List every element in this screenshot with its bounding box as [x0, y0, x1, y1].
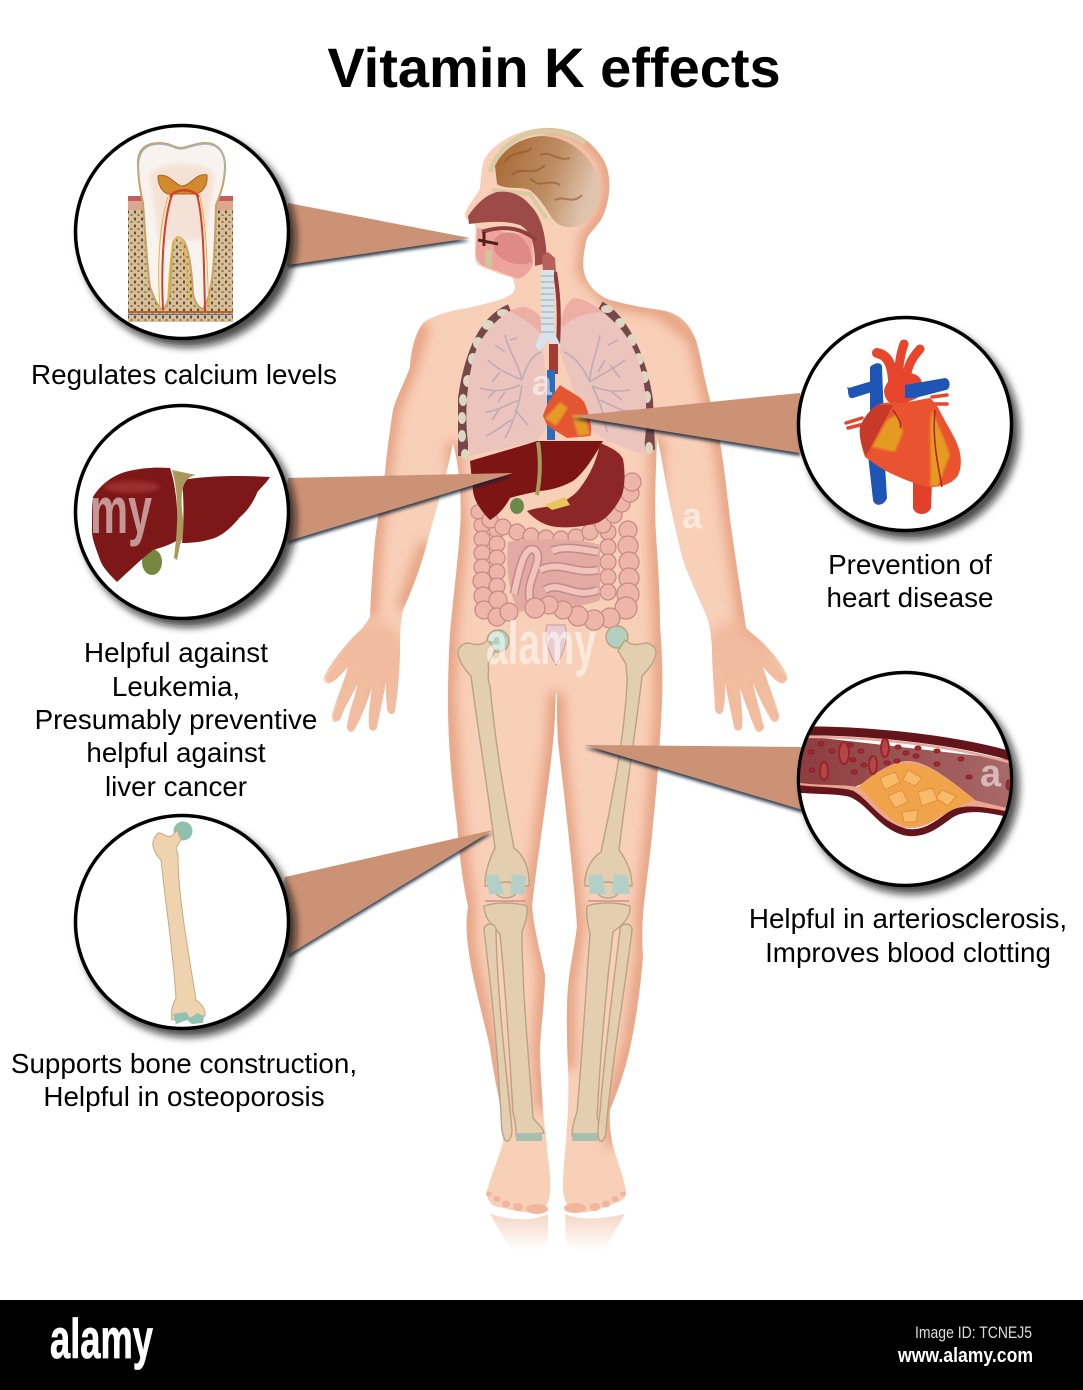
- plaque lining: [800, 761, 1015, 828]
- watermarks: my: [90, 473, 152, 547]
- label: leukemia and liver cancer: Helpful against: [84, 637, 268, 668]
- body silhouette: [324, 128, 787, 1212]
- panel: artery: [795, 672, 1015, 886]
- label: leukemia and liver cancer: helpful against: [86, 737, 266, 768]
- pointer: tooth callout: [288, 203, 470, 265]
- gallbladder: [142, 549, 162, 575]
- pointer: artery callout: [585, 745, 803, 810]
- panel: femur bone: [76, 816, 288, 1028]
- pointer: heart callout: [572, 393, 800, 453]
- right atrium shading: [860, 405, 893, 456]
- pulmonary vessel: [905, 378, 950, 398]
- trachea: [535, 252, 561, 351]
- label: heart disease: Prevention of: [828, 549, 992, 580]
- pointer: bone callout: [285, 830, 493, 955]
- superior vena cava: [870, 363, 884, 420]
- coronary vessels: [893, 410, 942, 487]
- red blood cells: [808, 739, 1012, 790]
- label: leukemia and liver cancer: Presumably preventive: [35, 704, 317, 735]
- plaque fat: [858, 763, 975, 826]
- label: leukemia and liver cancer: Leukemia,: [112, 671, 240, 702]
- panel: heart: [798, 318, 1012, 530]
- label: bone construction: Helpful in osteoporosis: [43, 1081, 325, 1112]
- right lung: [560, 298, 646, 454]
- artery lumen: [795, 735, 1015, 810]
- label: bone construction: Supports bone construction,: [11, 1048, 357, 1079]
- aortic arch: [884, 373, 922, 406]
- mouth and tongue: [476, 228, 536, 278]
- watermarks: a: [980, 753, 1002, 795]
- small intestine: [507, 539, 600, 612]
- watermarks: a: [682, 495, 703, 536]
- jaw bone: [128, 196, 233, 322]
- label: arteriosclerosis: Improves blood clotting: [765, 937, 1051, 968]
- lower artery wall: [795, 789, 1015, 833]
- label: leukemia and liver cancer: liver cancer: [105, 771, 247, 802]
- gallbladder and ligament: [510, 442, 570, 514]
- rectum: [546, 625, 567, 665]
- aortic branches: [846, 344, 947, 428]
- left lung: [466, 306, 550, 456]
- footer bar: [0, 1300, 1083, 1390]
- footer logo: alamy: [50, 1307, 153, 1370]
- right hand fingers: [717, 660, 782, 727]
- stomach: [527, 443, 625, 527]
- brain and skull: [490, 131, 600, 227]
- lower colon: [525, 596, 620, 630]
- femoral head: [174, 822, 192, 840]
- hepatic ligament: [172, 470, 196, 560]
- watermarks: [90, 362, 1002, 795]
- descending aorta: [913, 480, 932, 514]
- panel: tooth: [76, 126, 288, 338]
- nasal cavity and pharynx: [468, 192, 547, 266]
- ribs right: [600, 305, 653, 454]
- panel: liver: [76, 406, 288, 618]
- left hand fingers: [331, 660, 393, 727]
- liver highlight: [104, 481, 160, 493]
- femoral condyle cartilage: [173, 1012, 204, 1024]
- ribs left: [458, 309, 510, 459]
- femur shaft: [153, 830, 205, 1020]
- tooth root and crown: [138, 143, 225, 310]
- left lobe of liver: [182, 476, 270, 543]
- pointer: liver callout: [288, 473, 513, 541]
- foot reflection: [490, 1214, 625, 1251]
- upper artery wall: [795, 731, 1015, 757]
- toes: [486, 1192, 626, 1214]
- label: arteriosclerosis: Helpful in arteriosclerosis,: [749, 903, 1067, 934]
- liver in body: [470, 441, 603, 520]
- human body figure: [324, 128, 787, 1251]
- upper wall inner lining: [795, 737, 1015, 764]
- heart in body: [543, 344, 591, 440]
- left leg bones: [458, 630, 544, 1141]
- watermarks: a: [532, 362, 553, 403]
- heart muscle: [860, 398, 961, 487]
- label: heart disease: heart disease: [827, 582, 993, 613]
- right leg bones: [572, 626, 656, 1141]
- label: calcium: Regulates calcium levels: [31, 359, 337, 390]
- large intestine: [471, 473, 641, 626]
- right lobe of liver: [92, 468, 178, 582]
- inferior vena cava: [868, 455, 887, 505]
- tooth pulp: [158, 175, 209, 310]
- website: www.alamy.com: [897, 1345, 1033, 1367]
- heart gold patches: [872, 410, 950, 486]
- vena cava branch: [847, 381, 872, 398]
- title: Vitamin K effects: [327, 36, 781, 99]
- image id: Image ID: TCNEJ5: [915, 1323, 1032, 1342]
- watermarks: alamy: [486, 610, 596, 677]
